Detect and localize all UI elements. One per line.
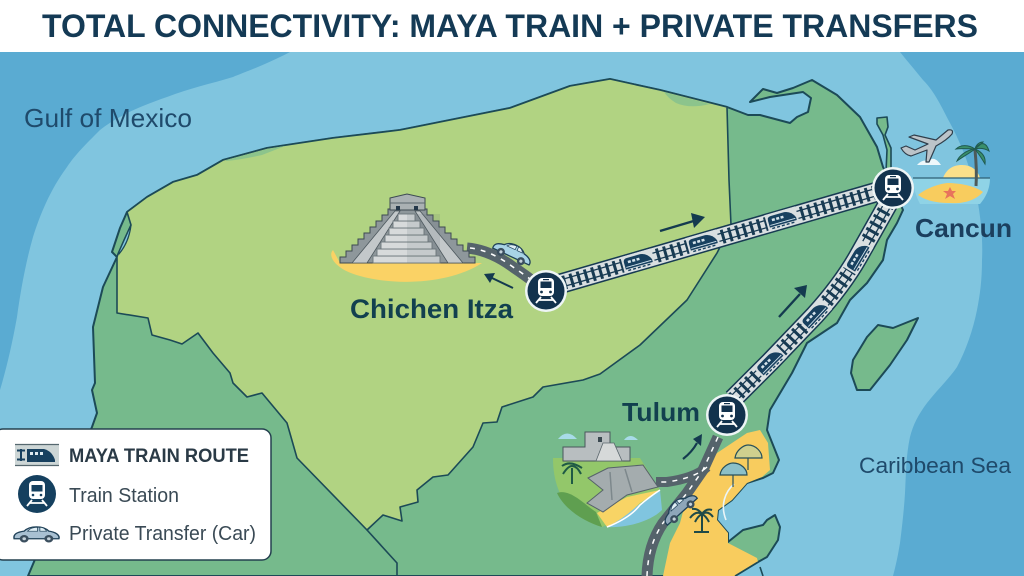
label: Cancun: Cancun xyxy=(915,213,1012,243)
station: Chichen Itza xyxy=(525,270,567,312)
arrow: to Tulum xyxy=(683,434,702,459)
legend xyxy=(0,429,271,560)
train route: Tulum to Cancun xyxy=(733,195,893,399)
arrow: to Chichen Itza xyxy=(484,273,513,288)
icon: car at Tulum xyxy=(659,489,700,528)
label: Gulf of Mexico: Gulf of Mexico xyxy=(24,103,192,133)
region: Yucatan state xyxy=(117,79,731,530)
state border south xyxy=(367,530,397,576)
icon: Chichen Itza pyramid xyxy=(331,194,482,282)
icon: Cancun beach and palm xyxy=(913,142,990,204)
icon: palm near Tulum xyxy=(690,509,713,532)
label: Chichen Itza: Chichen Itza xyxy=(350,294,514,324)
legend icon: train route xyxy=(15,444,59,466)
label: Caribbean Sea: Caribbean Sea xyxy=(859,453,1011,478)
legend label: car: Private Transfer (Car) xyxy=(69,523,256,545)
station: Cancun xyxy=(872,167,914,209)
beach coast near Tulum xyxy=(663,430,770,576)
legend label: route: MAYA TRAIN ROUTE xyxy=(69,446,249,467)
legend label: station: Train Station xyxy=(69,485,179,507)
legend icon: car xyxy=(14,527,59,543)
icon: airplane xyxy=(901,130,952,162)
legend icon: station xyxy=(18,475,56,513)
train route: Chichen Itza to Cancun xyxy=(556,191,880,285)
coastal shading xyxy=(226,92,710,161)
label: Tulum: Tulum xyxy=(622,397,700,427)
icon: Tulum ruins and cliff xyxy=(553,432,662,527)
icon: car at Chichen Itza xyxy=(491,237,534,269)
land: peninsula xyxy=(28,79,903,576)
icon: beach umbrellas xyxy=(720,445,762,487)
arrow: route north xyxy=(779,285,807,317)
lagoon spit xyxy=(118,225,131,254)
land: Isla Mujeres xyxy=(877,117,891,172)
land: Cozumel island xyxy=(851,318,918,390)
heading xyxy=(0,0,1024,52)
road: Chichen Itza transfer xyxy=(467,248,538,285)
arrow: route eastbound xyxy=(660,213,705,231)
heading: TOTAL CONNECTIVITY: MAYA TRAIN + PRIVATE TRANSFERS xyxy=(42,8,978,44)
station: Tulum xyxy=(706,394,748,436)
road: Tulum transfer xyxy=(647,437,718,576)
